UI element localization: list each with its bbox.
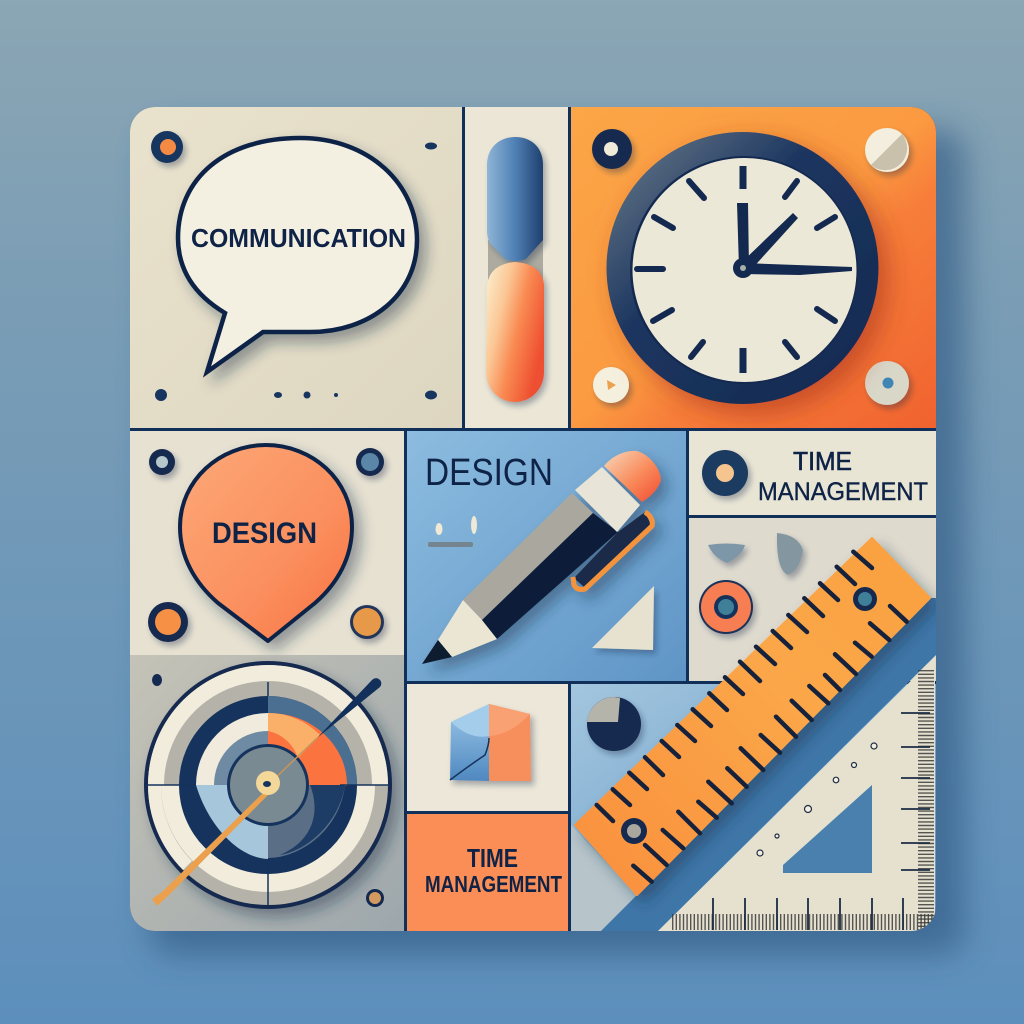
grey shape 2 — [777, 533, 803, 575]
set square cut-out — [783, 785, 872, 873]
card — [130, 107, 936, 932]
map pin — [180, 445, 352, 641]
heading: design in pin: DESIGN — [212, 517, 317, 550]
panel: time management label — [689, 431, 936, 515]
needle orange — [152, 790, 270, 906]
icon: dark dial — [587, 697, 641, 751]
clip — [573, 512, 652, 590]
diagonal band — [600, 598, 936, 932]
capsule bottom — [486, 262, 544, 402]
grey corner — [571, 825, 637, 932]
time: TIME — [467, 843, 518, 873]
small dots — [155, 142, 437, 401]
small holes — [757, 743, 877, 856]
long ticks — [713, 713, 930, 930]
icon: orange dot top left — [151, 131, 183, 163]
triangle — [592, 586, 654, 650]
fine scale — [672, 670, 935, 930]
pencil — [422, 451, 661, 664]
capsule top — [487, 137, 543, 261]
panel: tools — [571, 538, 936, 932]
ruler — [575, 538, 930, 895]
panel: target — [130, 655, 404, 931]
panel: communication — [130, 107, 462, 428]
capsule joint — [488, 240, 543, 280]
disc top right — [865, 128, 909, 172]
disc bottom left — [593, 367, 629, 403]
orange segment — [268, 713, 347, 786]
panel: shapes — [689, 518, 936, 681]
needle dark — [277, 678, 382, 776]
corner dots — [148, 448, 384, 642]
clock hands — [733, 203, 852, 278]
panel: envelope — [407, 684, 568, 811]
speech bubble — [178, 138, 417, 372]
small dots — [152, 674, 384, 907]
disc bottom right — [865, 361, 909, 405]
ruler ticks — [597, 552, 907, 882]
panel: time management orange — [407, 814, 568, 931]
ring icon — [702, 450, 748, 496]
small marks — [428, 516, 477, 547]
ruler holes — [621, 587, 877, 844]
panel: design pin — [130, 431, 404, 655]
management: MANAGEMENT — [758, 478, 928, 506]
ring top left — [592, 129, 632, 169]
set square — [657, 657, 935, 932]
clock ticks — [637, 166, 835, 373]
time: TIME — [793, 446, 852, 476]
grey shape — [708, 544, 745, 563]
heading: design: DESIGN — [425, 452, 553, 494]
panel: design pencil — [407, 431, 686, 681]
panel: capsule — [465, 107, 568, 428]
panel: clock — [571, 107, 936, 428]
donut — [699, 580, 753, 634]
icon: folded envelope — [450, 704, 531, 781]
heading: communication: COMMUNICATION — [191, 223, 406, 253]
card shadow — [150, 130, 965, 955]
management: MANAGEMENT — [425, 871, 562, 897]
target dial — [144, 661, 392, 909]
clock — [606, 132, 878, 404]
hub — [256, 771, 280, 795]
